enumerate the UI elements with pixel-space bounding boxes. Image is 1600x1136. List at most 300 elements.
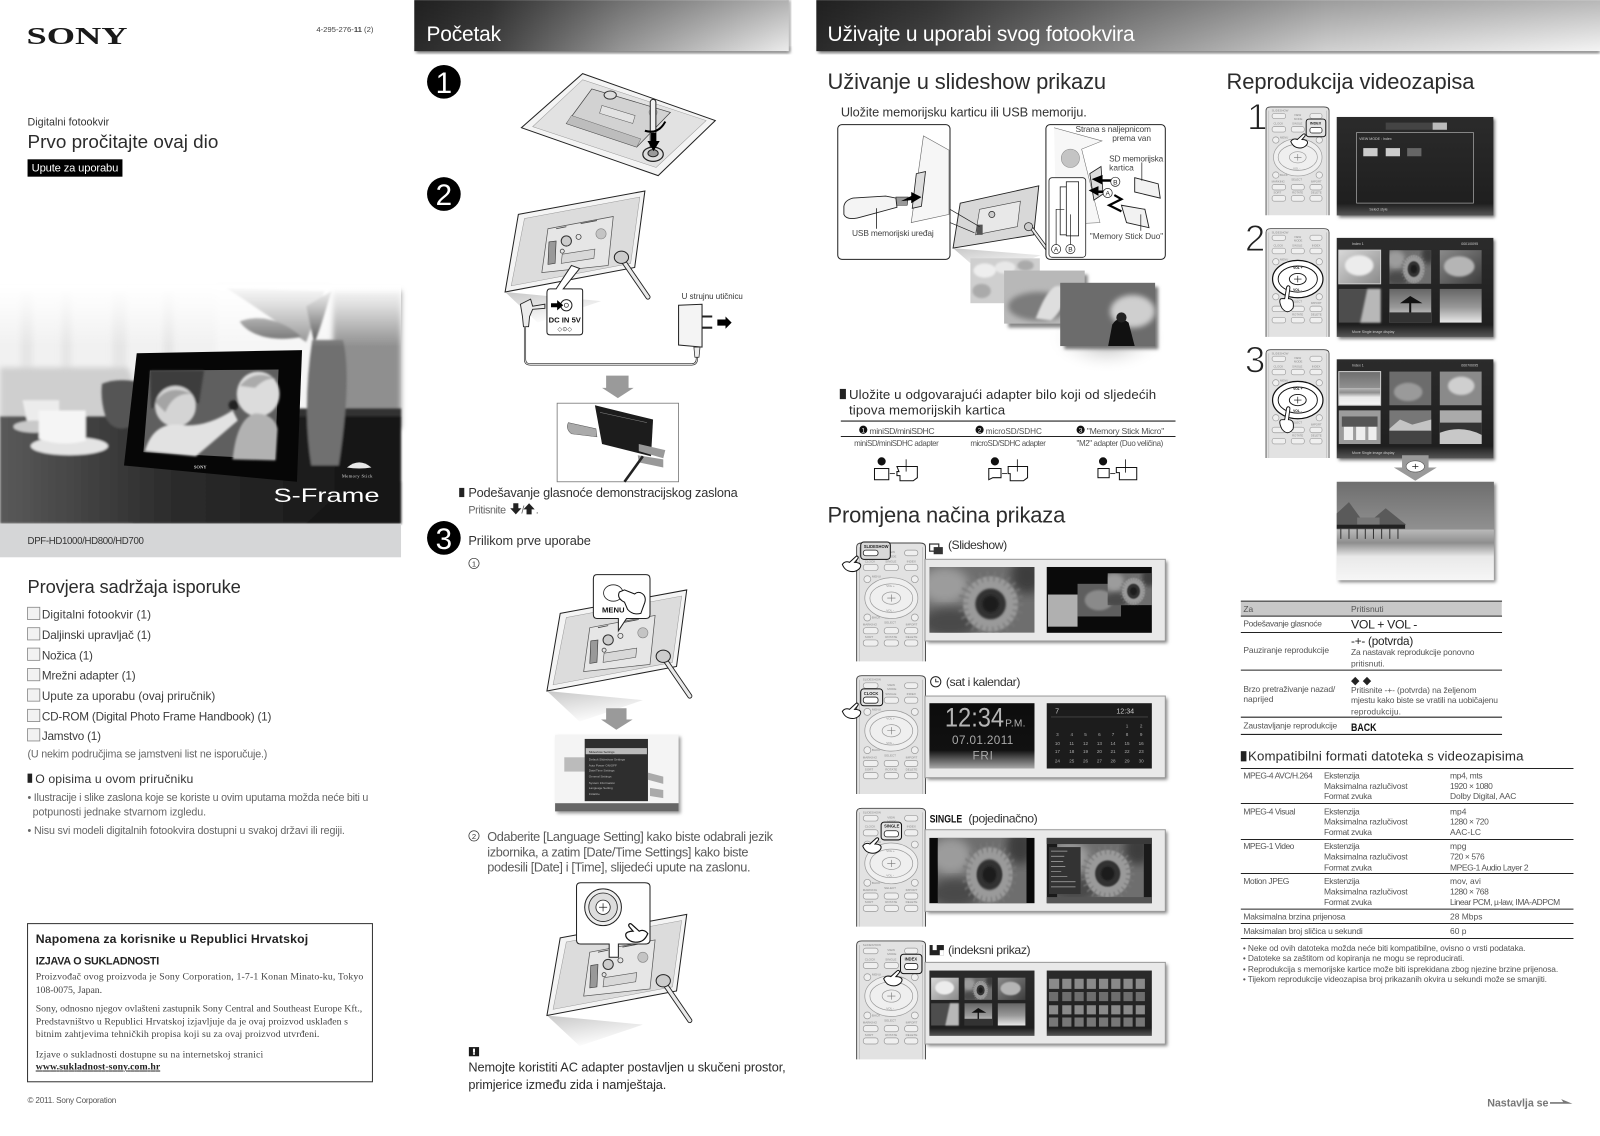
icon: clock (931, 677, 941, 687)
table: adapters: 3 (1079, 427, 1083, 434)
label: clock: (sat i kalendar) (946, 675, 1020, 689)
table: formats: 28 Mbps (1450, 912, 1482, 922)
screenshot: settings menu: Auto Power ON/OFF (589, 763, 617, 767)
remote control: INDEX (907, 692, 916, 696)
table: formats: mp4 (1450, 806, 1467, 816)
panel: Croatian declaration: 108-0075, Japan. (36, 985, 102, 996)
calendar screen: 19 (1083, 749, 1089, 754)
table: playback controls: naprijed (1243, 694, 1274, 704)
table: formats: Ekstenzija (1324, 876, 1360, 886)
calendar screen: 3 (1056, 732, 1059, 737)
warning (468, 1047, 786, 1092)
calendar screen: 22 (1124, 749, 1130, 754)
table: adapters: "Memory Stick Micro" (1087, 426, 1164, 436)
instruction: volume: Pritisnite (468, 504, 506, 516)
remote control: SLIDESHOW (863, 810, 881, 814)
remote control: SLIDESHOW (1272, 109, 1289, 113)
panel: Croatian declaration: www.sukladnost-sony.com.hr (36, 1062, 161, 1073)
calendar screen: 2 (1140, 724, 1143, 729)
checklist (28, 607, 272, 743)
remote control: ROTATE (1292, 312, 1303, 316)
screenshot: settings menu: Date/Time Settings (589, 769, 615, 773)
table: formats: MPEG-1 Audio Layer 2 (1450, 863, 1529, 873)
remote control: IMPORT (906, 888, 918, 892)
notes list: potpunosti jednake stvarnom izgledu. (33, 806, 206, 818)
remote control: INDEX (1310, 122, 1322, 126)
callout: dial (577, 883, 650, 957)
remote control: MARKING (863, 888, 878, 892)
calendar screen: 14 (1111, 741, 1116, 746)
warranty note: (U nekim područjima se jamstveni list ne isporučuje.) (28, 748, 267, 760)
calendar screen: 25 (1069, 758, 1075, 763)
table: formats: Ekstenzija (1324, 771, 1360, 781)
step 3 badge: 3 (436, 523, 452, 556)
table: formats: mov, avi (1450, 876, 1481, 886)
table: adapters: miniSD/miniSDHC adapter (854, 439, 939, 448)
table: playback controls: pritisnuti. (1351, 658, 1385, 668)
remote control (857, 808, 926, 927)
calendar screen: 21 (1111, 749, 1116, 754)
label: single: (pojedinačno) (968, 812, 1038, 826)
remote control: CLOCK (865, 559, 875, 563)
remote control: VOL + (886, 849, 895, 853)
logo: S-Frame: S-Frame (273, 485, 380, 507)
checklist: Jamstvo (1) (42, 730, 101, 743)
heading: delivery contents: Provjera sadržaja isporuke (28, 576, 241, 597)
instruction: language and date (469, 829, 774, 875)
remote control: SINGLE (885, 692, 896, 696)
remote control: MODE (1294, 360, 1303, 364)
checklist: Digitalni fotookvir (1) (42, 609, 151, 622)
remote control: VOL + (1293, 144, 1301, 148)
remote control: SLIDESHOW (863, 678, 881, 682)
checklist: Daljinski upravljač (1) (42, 629, 151, 642)
screenshot: settings menu (555, 735, 681, 813)
header: Početak: Početak (427, 23, 502, 46)
logo: Memory Stick (342, 462, 373, 479)
step 3 badge (427, 521, 461, 556)
screenshot: settings menu: Language Setting (589, 786, 613, 790)
screens panel (925, 828, 1167, 913)
table: formats (1241, 769, 1573, 939)
remote control: VIEW (1294, 356, 1302, 360)
icon: slideshow (930, 544, 943, 554)
calendar screen: 28 (1111, 758, 1116, 763)
calendar screen: 23 (1139, 749, 1144, 754)
table: playback controls: Za (1243, 604, 1254, 614)
panel: Croatian declaration: Predstavništvo u Republici Hrvatskoj izjavljuje da je ovaj proizvod usklađen s (36, 1017, 348, 1028)
model band (0, 524, 401, 557)
photo frame: SONY (194, 465, 207, 470)
notes: video: • Tijekom reprodukcije videozapisa broj prikazanih okvira u sekundi može se smanjiti. (1243, 974, 1547, 984)
calendar screen: 4 (1070, 732, 1073, 737)
remote control: CLOCK (1273, 364, 1283, 368)
screen: index page 1 (1337, 238, 1495, 339)
panel: card slot callout: A (1105, 191, 1110, 198)
table: formats: Ekstenzija (1324, 841, 1360, 851)
marker: sub-step 1: 1 (472, 559, 476, 568)
table: adapters: microSD/SDHC adapter (970, 439, 1046, 448)
table: adapters (841, 421, 1176, 481)
panel: card slot callout (1046, 124, 1165, 259)
remote control: MODE (887, 952, 896, 956)
remote control: VIEW (887, 948, 895, 952)
remote control: DELETE (906, 768, 917, 772)
remote control: VOL + (886, 717, 895, 721)
instruction: language and date: podesili [Date] i [Time], slijedeći upute na zaslonu. (487, 860, 751, 875)
remote control: SLIDESHOW (863, 943, 881, 947)
remote control: DELETE (906, 635, 917, 639)
table: formats: MPEG-1 Video (1243, 841, 1295, 851)
calendar screen: 17 (1055, 749, 1060, 754)
label: slideshow: (Slideshow) (948, 538, 1007, 552)
table: formats: Maksimalna razlučivost (1324, 817, 1408, 827)
calendar screen: 10 (1055, 741, 1060, 746)
remote control: VOL - (886, 1006, 894, 1010)
remote control: SINGLE (885, 957, 896, 961)
checklist: Upute za uporabu (ovaj priručnik) (42, 690, 215, 703)
copyright: © 2011. Sony Corporation (28, 1096, 116, 1105)
table: playback controls (1241, 601, 1502, 734)
screen: view mode menu: VIEW MODE : Index (1359, 137, 1392, 141)
header: Uživajte (816, 0, 1600, 53)
illustration: connect adapter (505, 191, 743, 482)
remote control: CLOCK (865, 825, 875, 829)
remote control: SORT (865, 635, 873, 639)
remote control: VOL + (886, 584, 895, 588)
calendar screen: 6 (1098, 732, 1101, 737)
screens panel: FRI (972, 749, 993, 762)
heading: slideshow: Uživanje u slideshow prikazu (828, 69, 1106, 94)
panel: getting started (427, 65, 786, 1092)
panel: card slot callout: kartica (1109, 163, 1134, 173)
remote control: CLOCK (1273, 122, 1283, 126)
calendar screen: 29 (1124, 758, 1130, 763)
remote control: CLOCK (864, 691, 878, 696)
screens panel: 07.01.2011 (952, 734, 1013, 747)
screens panel (925, 962, 1167, 1046)
remote control (1266, 107, 1329, 215)
remote control: SELECT (1291, 299, 1302, 303)
notes: video: • Datoteke sa zaštitom od kopiranja ne mogu se reproducirati. (1243, 953, 1464, 963)
calendar screen: 27 (1097, 758, 1102, 763)
remote control: ROTATE (885, 768, 897, 772)
cover photo (0, 284, 401, 524)
calendar screen: 15 (1124, 741, 1130, 746)
remote control: INDEX (907, 559, 916, 563)
panel: Croatian declaration: Napomena za korisnike u Republici Hrvatskoj (36, 932, 308, 946)
notes: video (1243, 943, 1558, 984)
thumbnails: 32 grid (1049, 979, 1145, 1027)
table: formats: Maksimalna razlučivost (1324, 887, 1408, 897)
table: formats: mpg (1450, 841, 1467, 851)
panel: video playback (1227, 69, 1573, 1109)
panel: Croatian declaration: bitnim zahtjevima tehničkih propisa koji su za ovaj proizvod utvrđeni. (36, 1029, 319, 1040)
heading: first use: Prilikom prve uporabe (468, 533, 591, 548)
remote control: BACK (872, 1013, 880, 1017)
slot inset (1049, 178, 1086, 257)
remote control: VIEW (1294, 235, 1302, 239)
remote control: IMPORT (906, 623, 918, 627)
remote control: DELETE (1311, 191, 1322, 195)
warning: primjerice između zida i namještaja. (468, 1077, 666, 1092)
instruction: language and date: izbornika, a zatim [Date/Time Settings] kako biste (487, 844, 748, 859)
row: slideshow (842, 538, 1167, 661)
remote control: MENU (872, 707, 881, 711)
callout: DC IN 5V: ◇⊙◇ (558, 326, 572, 333)
slot inset: B (1068, 247, 1073, 254)
icon: microSD adapter (989, 458, 1028, 481)
calendar screen: 8 (1126, 732, 1129, 737)
calendar screen: 24 (1055, 758, 1060, 763)
table: playback controls: Pauziranje reprodukcije (1243, 645, 1329, 655)
remote control: ROTATE (1292, 191, 1303, 195)
remote control (1266, 350, 1329, 458)
remote control (1266, 229, 1329, 337)
notes list: • Nisu svi modeli digitalnih fotookvira dostupni u svakoj državi ili regiji. (28, 825, 345, 837)
remote control: BACK (872, 881, 880, 885)
panel: view modes (828, 503, 1167, 1059)
heading: adapter (840, 387, 1156, 417)
table: formats: Maksimalna razlučivost (1324, 781, 1408, 791)
illustration: control pad (547, 883, 690, 1046)
calendar screen: 26 (1083, 758, 1089, 763)
table: playback controls: Podešavanje glasnoće (1243, 619, 1322, 629)
panel: Croatian declaration: Proizvođač ovog proizvoda je Sony Corporation, 1-7-1 Konan Minato-ku, Tokyo (36, 972, 363, 983)
step 3: 3 (1245, 340, 1265, 381)
remote control: VOL - (886, 608, 894, 612)
screen: index page 2: Index 1 (1352, 363, 1364, 367)
remote control: MARKING (863, 755, 878, 759)
panel: Croatian declaration: Sony, odnosno njegov ovlašteni zastupnik Sony Central and Southeast Europe Kft., (36, 1003, 362, 1014)
header: Uživajte: Uživajte u uporabi svog fotookvira (828, 23, 1135, 46)
remote control: ROTATE (885, 1033, 897, 1037)
illustration: menu button (547, 575, 690, 722)
panel: slideshow (828, 69, 1176, 481)
center frame (953, 186, 1050, 276)
remote control: MODE (887, 820, 896, 824)
screen: index page 1: Move Single image display (1352, 330, 1395, 334)
AC adapter (679, 304, 732, 357)
main title: Prvo pročitajte ovaj dio (28, 131, 218, 152)
table: playback controls: Pritisnuti (1351, 604, 1384, 614)
step 3 (1245, 340, 1495, 460)
icon: miniSD adapter (874, 458, 917, 481)
screens panel (925, 696, 1167, 780)
panel: card slot callout: "Memory Stick Duo" (1090, 231, 1163, 241)
remote control: MENU (1280, 257, 1288, 261)
screens panel (920, 557, 1167, 643)
marker: sub-step 1 (469, 558, 479, 569)
instruction: volume: . (536, 504, 539, 516)
table: playback controls: Za nastavak reprodukcije ponovno (1351, 647, 1475, 657)
panel: USB callout (838, 125, 980, 259)
table: formats: 60 p (1450, 926, 1467, 936)
table: playback controls: Pritisnite -+- (potvrda) na željenom (1351, 685, 1477, 695)
label: index: (indeksni prikaz) (948, 943, 1031, 957)
remote control: SORT (865, 900, 873, 904)
large beach image (1337, 482, 1496, 582)
step 2 badge: 2 (436, 179, 452, 212)
remote control: VIEW (887, 816, 895, 820)
table: formats: 720 × 576 (1450, 851, 1485, 861)
remote control (842, 542, 926, 661)
remote control: MODE (1294, 117, 1303, 121)
step 1 badge: 1 (436, 67, 452, 100)
screenshot: settings menu: Slideshow Settings (589, 750, 615, 754)
remote control: SELECT (884, 753, 896, 757)
table: formats: 1280 × 768 (1450, 887, 1489, 897)
screens panel: P.M. (1005, 719, 1026, 730)
step 1: 1 (1247, 97, 1267, 138)
instruction: insert card: Uložite memorijsku karticu ili USB memoriju. (841, 104, 1087, 119)
remote control: VOL + (1293, 266, 1303, 270)
remote control: MARKING (863, 1021, 878, 1025)
heading: adapter: Uložite u odgovarajući adapter bilo koji od sljedećih (849, 387, 1156, 402)
remote control: SINGLE (1292, 243, 1303, 247)
table: adapters: microSD/SDHC (986, 427, 1042, 436)
remote control: INDEX (1312, 243, 1320, 247)
heading: adapter: tipova memorijskih kartica (849, 402, 1006, 417)
callout: MENU (593, 575, 650, 631)
panel: cover (0, 23, 401, 1105)
step 2 badge (427, 177, 461, 212)
badge: manual type (28, 159, 122, 177)
heading: about descriptions: O opisima u ovom priručniku (35, 772, 193, 786)
remote control: MARKING (1272, 180, 1285, 184)
checklist: CD-ROM (Digital Photo Frame Handbook) (1) (42, 711, 272, 724)
illustration: attach stand (521, 74, 715, 176)
label: single: SINGLE (930, 814, 963, 826)
remote control: SINGLE (884, 824, 900, 829)
table: formats: Motion JPEG (1243, 876, 1289, 886)
table: playback controls: reprodukciju. (1351, 706, 1401, 716)
panel: Croatian declaration (28, 924, 372, 1082)
calendar screen: 13 (1097, 741, 1102, 746)
table: formats: MPEG-4 Visual (1243, 806, 1296, 816)
remote control: MENU (1280, 378, 1288, 382)
remote control: SELECT (884, 621, 896, 625)
remote control: SELECT (884, 886, 896, 890)
calendar screen: 9 (1140, 732, 1143, 737)
remote control: MODE (1294, 239, 1303, 243)
remote control: VIEW (887, 683, 895, 687)
instruction: language and date: Odaberite [Language Setting] kako biste odabrali jezik (487, 829, 774, 844)
heading: formats: Kompatibilni formati datoteka s videozapisima (1248, 748, 1524, 763)
remote control: SLIDESHOW (1272, 230, 1289, 234)
notes: video: • Neke od ovih datoteka možda neće biti kompatibilne, ovisno o vrsti podataka. (1243, 943, 1526, 953)
logo: SONY: SONY (27, 23, 128, 50)
panel: card slot callout: B (1113, 179, 1118, 186)
remote control (842, 676, 926, 794)
label: single (930, 812, 1038, 826)
remote control: SINGLE (1292, 364, 1303, 368)
remote control: MARKING (863, 623, 878, 627)
table: formats: Format zvuka (1324, 863, 1372, 873)
calendar screen: 5 (1084, 732, 1087, 737)
step 1 (1247, 97, 1495, 217)
badge: manual type: Upute za uporabu (32, 163, 118, 175)
remote control: SELECT (1291, 178, 1302, 182)
photos: slideshow stack (970, 258, 1168, 374)
calendar screen: 7 (1112, 732, 1115, 737)
table: adapters: 1 (861, 427, 865, 434)
calendar screen: 1 (1126, 724, 1129, 729)
remote control: VOL + (886, 982, 895, 986)
table: formats: mp4, mts (1450, 771, 1483, 781)
row: index (857, 941, 1167, 1059)
remote control: IMPORT (1311, 422, 1322, 426)
label: to outlet: U strujnu utičnicu (682, 292, 743, 301)
remote control: DELETE (1311, 433, 1322, 437)
remote control: ROTATE (885, 635, 897, 639)
screenshot: settings menu: System Information (589, 781, 615, 785)
remote control: IMPORT (906, 1021, 918, 1025)
heading: video: Reprodukcija videozapisa (1227, 69, 1475, 94)
panel: card slot callout: Strana s naljepnicom (1076, 124, 1151, 134)
remote control: VOL - (1293, 166, 1300, 170)
screen: view mode menu: Select style (1369, 207, 1388, 211)
remote control: SINGLE (885, 559, 896, 563)
remote control: DELETE (1311, 312, 1322, 316)
table: formats: Format zvuka (1324, 791, 1372, 801)
remote control: MENU (872, 575, 881, 579)
callout: MENU: MENU (602, 605, 625, 614)
remote control: IMPORT (906, 755, 918, 759)
product category: Digitalni fotookvir (28, 117, 110, 129)
calendar screen: 20 (1097, 749, 1102, 754)
table: formats: Maksimalna brzina prijenosa (1243, 912, 1346, 922)
screen: view mode menu (1337, 117, 1495, 217)
table: playback controls: VOL + VOL - (1351, 618, 1417, 632)
remote control: VOL - (886, 874, 894, 878)
arrow: next (601, 708, 633, 730)
heading: demo volume: Podešavanje glasnoće demonstracijskog zaslona (468, 485, 739, 500)
calendar screen: 11 (1069, 741, 1075, 746)
remote control: SORT (865, 1033, 873, 1037)
remote control: MODE (887, 554, 896, 558)
calendar screen: 18 (1069, 749, 1075, 754)
checklist: Nožica (1) (42, 649, 93, 662)
screenshot: settings menu: Default Slideshow Settings (589, 757, 625, 761)
remote control: BACK (872, 616, 880, 620)
instruction: volume (468, 503, 539, 516)
screen: index page 2 (1337, 359, 1495, 460)
calendar screen: 12 (1083, 741, 1089, 746)
icon: index (930, 945, 944, 955)
table: playback controls: Brzo pretraživanje nazad/ (1243, 684, 1336, 694)
arrow: next (602, 376, 634, 398)
callout: DC IN 5V: DC IN 5V (549, 316, 582, 325)
screens panel: 12:34 (945, 703, 1004, 733)
panel: Croatian declaration: IZJAVA O SUKLADNOSTI (36, 955, 159, 967)
notes: video: • Reprodukcija s memorijske kartice može biti isprekidana zbog njezine brzine prijenosa. (1243, 964, 1558, 974)
table: playback controls: -+- (potvrda) (1351, 635, 1413, 648)
panel: card slot callout: SD memorijska (1109, 153, 1164, 163)
calendar screen: 16 (1139, 741, 1144, 746)
notes list: • Ilustracije i slike zaslona koje se koriste u ovim uputama možda neće biti u (28, 792, 368, 804)
table: formats: Format zvuka (1324, 897, 1372, 907)
table: formats: 1920 × 1080 (1450, 781, 1493, 791)
remote control: VOL - (1293, 409, 1302, 413)
panel: Croatian declaration: Izjave o sukladnosti dostupne su na internetskoj stranici (36, 1049, 264, 1060)
table: formats: Dolby Digital, AAC (1450, 791, 1516, 801)
checklist: Mrežni adapter (1) (42, 670, 136, 683)
remote control: VOL + (1293, 387, 1303, 391)
remote control: CLOCK (865, 957, 875, 961)
table: formats: Linear PCM, µ-law, IMA-ADPCM (1450, 897, 1560, 907)
screenshot: settings menu: Initialize (589, 792, 600, 796)
